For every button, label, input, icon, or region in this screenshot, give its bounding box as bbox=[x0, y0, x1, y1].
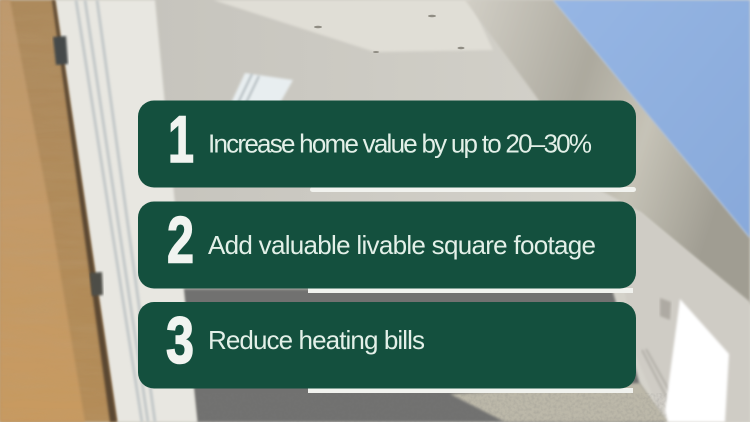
trim grooves bbox=[76, 0, 155, 422]
skirting lines bbox=[642, 349, 670, 400]
ceiling spotlights bbox=[314, 15, 464, 53]
right wall bbox=[612, 212, 750, 422]
underline 3 bbox=[308, 388, 633, 393]
door frame white trim bbox=[53, 0, 197, 422]
carpet floor bbox=[183, 289, 665, 422]
text 2: Add valuable livable square footage bbox=[208, 230, 596, 260]
underline 1 bbox=[310, 187, 636, 192]
sunlit carpet bbox=[450, 383, 668, 422]
sloped ceiling band bbox=[465, 0, 750, 305]
room walls bbox=[150, 0, 750, 422]
number 3: 3 bbox=[166, 303, 194, 377]
number 2: 2 bbox=[167, 202, 194, 276]
text 3: Reduce heating bills bbox=[208, 325, 425, 355]
panel 3: reduce heating bills bbox=[138, 302, 636, 393]
white window reveal bbox=[665, 299, 729, 422]
card 1 bbox=[138, 100, 636, 188]
card 3 bbox=[138, 302, 636, 388]
panel 2: add livable square footage bbox=[138, 202, 636, 293]
ceiling bbox=[213, 0, 493, 52]
text 1: Increase home value by up to 20–30% bbox=[208, 128, 592, 158]
underline 2 bbox=[308, 288, 633, 293]
blue painted slope bbox=[553, 0, 750, 238]
door panel wood bbox=[0, 0, 117, 422]
number 1: 1 bbox=[168, 102, 194, 176]
wall socket bbox=[660, 298, 671, 320]
panel 1: increase home value bbox=[138, 100, 636, 192]
skylight bbox=[231, 73, 293, 103]
door hinges bbox=[53, 36, 68, 65]
card 2 bbox=[138, 202, 636, 288]
carpet speckle bbox=[197, 393, 667, 422]
